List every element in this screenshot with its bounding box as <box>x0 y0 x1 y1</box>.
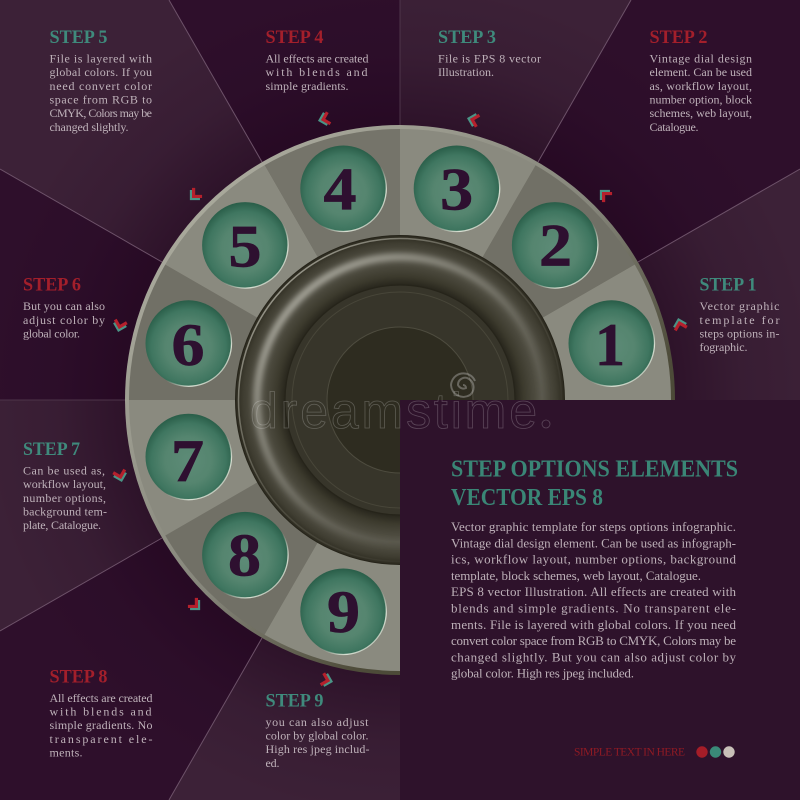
text: step 6 <box>23 275 105 340</box>
watermark: dreamstime <box>250 383 537 439</box>
text: step 8: simple gradients. No <box>50 718 152 732</box>
button 2 <box>512 202 598 288</box>
main body text: ments. File is layered with global colors. If you need <box>451 617 736 632</box>
text: step 7: background tem- <box>23 504 107 518</box>
main heading <box>451 457 738 511</box>
arrow step 9 <box>321 673 332 687</box>
main body text: convert color space from RGB to CMYK, Colors may be <box>451 633 736 648</box>
text: step 8: All effects are created <box>50 691 152 705</box>
arrow step 2 <box>597 187 612 202</box>
text: step 3 <box>438 27 541 79</box>
main body text: Vector graphic template for steps options infographic. <box>451 519 736 534</box>
text: step 6: STEP 6 <box>23 275 81 296</box>
main body text: Vintage dial design element. Can be used as infograph- <box>451 535 736 550</box>
text: step 3: Illustration. <box>438 65 494 79</box>
button 3 <box>414 146 500 232</box>
button 4: 4 <box>324 156 356 222</box>
dial sectors <box>129 129 671 671</box>
text: step 2: as, workflow layout, <box>650 79 752 93</box>
text: step 8: STEP 8 <box>50 667 108 688</box>
button 6: 6 <box>172 312 204 378</box>
button 1: 1 <box>595 312 625 378</box>
text: step 6: adjust color by <box>23 313 105 327</box>
text: step 6: global color. <box>23 326 80 340</box>
text: step 8: with blends and <box>50 704 152 718</box>
button 8 <box>202 512 288 598</box>
text: step 5: global colors. If you <box>50 65 152 79</box>
text: step 5: changed slightly. <box>50 120 128 134</box>
button 7 <box>146 414 232 500</box>
centre hub <box>236 236 564 564</box>
text: step 5: CMYK, Colors may be <box>50 106 152 120</box>
button 3: 3 <box>440 156 473 222</box>
vintage dial <box>125 125 675 675</box>
text: step 5 <box>50 27 152 134</box>
text: step 8: ments. <box>50 746 82 760</box>
text: step 1 <box>700 275 780 354</box>
text: step 5: STEP 5 <box>50 27 108 48</box>
text: step 7: STEP 7 <box>23 439 80 460</box>
arrow step 3 <box>468 113 479 127</box>
button 1 <box>568 300 654 386</box>
main body text: ics, workflow layout, number options, background <box>451 552 736 567</box>
text: step 2: Catalogue. <box>650 120 698 134</box>
button 4 <box>300 146 386 232</box>
text: step 7 <box>23 439 107 532</box>
button 5: 5 <box>228 214 262 280</box>
arrow step 1 <box>673 319 687 330</box>
main body text <box>451 519 736 680</box>
main body text: template, block schemes, web layout, Catalogue. <box>451 568 701 583</box>
text: step 2 <box>650 27 752 134</box>
arrow step 5 <box>187 188 202 203</box>
button 5 <box>202 202 288 288</box>
main body text: blends and simple gradients. No transparent ele- <box>451 600 736 616</box>
text: step 1: Vector graphic <box>700 299 780 313</box>
text: step 8: transparent ele- <box>50 732 152 746</box>
arrow step 7 <box>113 470 127 481</box>
text: step 4: with blends and <box>266 65 368 79</box>
text: step 2: Vintage dial design <box>650 52 752 66</box>
main body text: global color. High res jpeg included. <box>451 666 634 680</box>
text: step 3: File is EPS 8 vector <box>438 52 541 66</box>
text: step 6: But you can also <box>23 299 105 313</box>
text: step 9: you can also adjust <box>266 715 369 729</box>
arrow step 4 <box>319 112 330 126</box>
button 2: 2 <box>539 212 572 278</box>
arrow step 8 <box>188 598 203 613</box>
text: step 5: File is layered with <box>50 52 152 66</box>
main heading: STEP OPTIONS ELEMENTS <box>451 457 738 483</box>
text: step 9: ed. <box>266 756 280 770</box>
button 6 <box>146 300 232 386</box>
text: step 4: simple gradients. <box>266 79 348 93</box>
panel: main description <box>400 400 800 800</box>
text: step 9: STEP 9 <box>266 691 324 712</box>
main body text: EPS 8 vector Illustration. All effects are created with <box>451 584 736 599</box>
text: step 1: steps options in- <box>700 326 780 340</box>
arrow step 6 <box>113 320 127 331</box>
text: step 7: Can be used as, <box>23 464 105 478</box>
text: step 9 <box>266 691 370 770</box>
text: step 7: number options, <box>23 491 106 505</box>
text: step 1: template for <box>700 313 780 327</box>
button 9: 9 <box>327 579 360 645</box>
text: step 8 <box>50 667 152 760</box>
text: step 4: STEP 4 <box>266 27 324 48</box>
text: step 5: need convert color <box>50 79 152 93</box>
button 7: 7 <box>171 428 204 494</box>
text: step 7: plate, Catalogue. <box>23 518 101 532</box>
text: step 9: High res jpeg includ- <box>266 742 370 756</box>
main body text: changed slightly. But you can also adjust color by <box>451 650 736 664</box>
main heading: VECTOR EPS 8 <box>451 485 603 511</box>
text: step 2: element. Can be used <box>650 65 752 79</box>
footer label: SIMPLE TEXT IN HERE <box>574 747 685 759</box>
text: step 7: workflow layout, <box>23 477 106 491</box>
button 8: 8 <box>228 522 261 588</box>
text: step 1: STEP 1 <box>700 275 756 296</box>
text: step 4 <box>266 27 368 93</box>
text: step 5: space from RGB to <box>50 92 152 106</box>
text: step 2: schemes, web layout, <box>650 106 752 120</box>
dial rim <box>125 125 675 675</box>
text: step 9: color by global color. <box>266 728 368 742</box>
text: step 2: STEP 2 <box>650 27 708 48</box>
button 9 <box>300 568 386 654</box>
text: step 1: fographic. <box>700 340 748 354</box>
text: step 2: number option, block <box>650 92 752 106</box>
colour dots <box>696 746 735 758</box>
text: step 3: STEP 3 <box>438 27 496 48</box>
text: step 4: All effects are created <box>266 52 368 66</box>
